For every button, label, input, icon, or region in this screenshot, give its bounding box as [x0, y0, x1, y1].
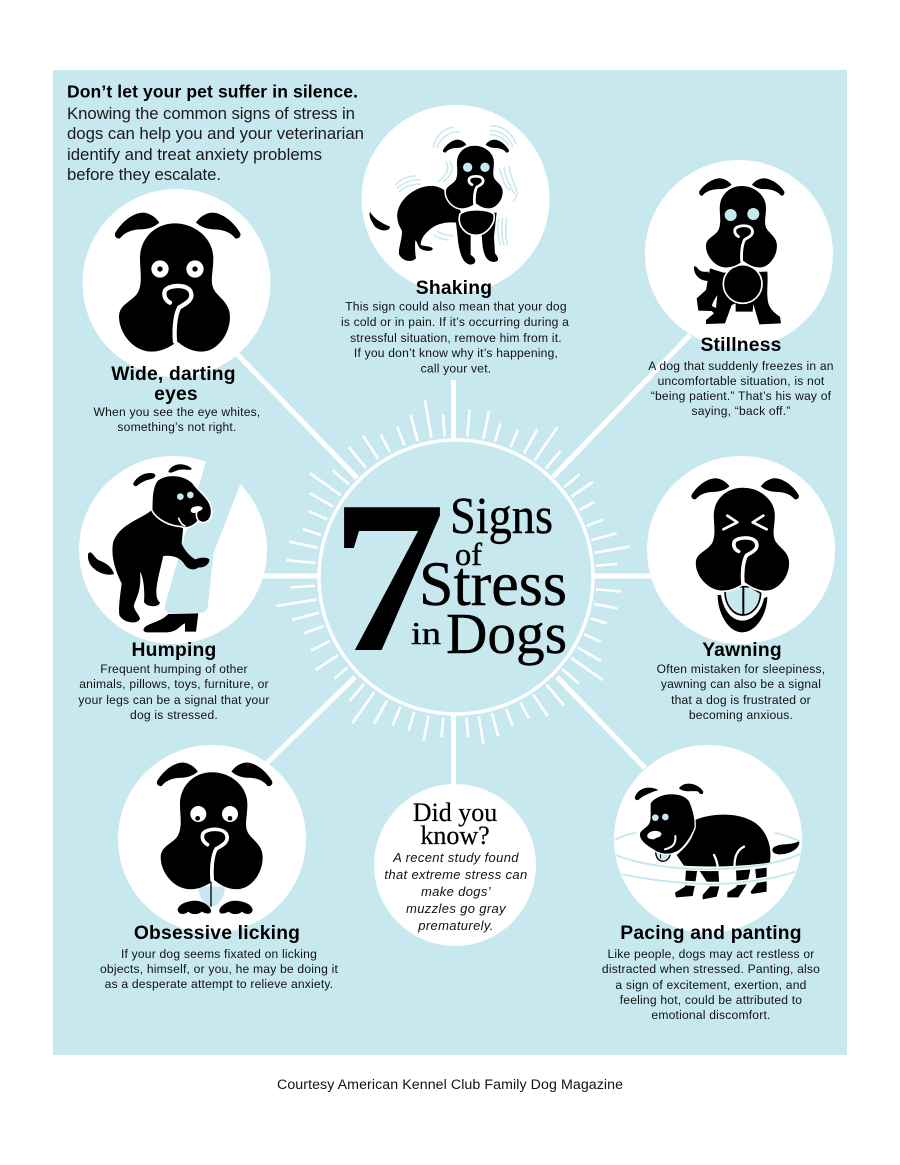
intro text block: Don’t let your pet suffer in silence.: [67, 82, 358, 102]
spokes connecting the center to each sign: [235, 335, 690, 790]
description: [341, 300, 569, 376]
title: 7 Signs of Stress in Dogs: 7: [331, 457, 446, 698]
sign: obsessive licking: [100, 745, 338, 991]
description: “being patient.” That’s his way of: [651, 389, 832, 403]
description: stressful situation, remove him from it.: [350, 331, 562, 345]
heading: Humping: [132, 640, 216, 661]
description: Often mistaken for sleepiness,: [657, 662, 825, 676]
heading: Yawning: [702, 640, 782, 661]
window cutout: [165, 450, 240, 613]
description: This sign could also mean that your dog: [345, 300, 567, 314]
heading: Pacing and panting: [620, 923, 802, 944]
description: A dog that suddenly freezes in an: [648, 359, 834, 373]
description: If you don’t know why it’s happening,: [354, 346, 558, 360]
description: [78, 662, 270, 722]
description: call your vet.: [421, 362, 491, 376]
description: saying, “back off.”: [691, 404, 791, 418]
icon: dog with wide eyes: [115, 213, 240, 352]
background panel: [53, 70, 847, 1055]
icon: yawning dog: [691, 478, 799, 632]
description: is cold or in pain. If it’s occurring during a: [341, 315, 569, 329]
description: Like people, dogs may act restless or: [607, 947, 815, 961]
title: 7 Signs of Stress in Dogs: in: [411, 615, 441, 651]
intro text block: identify and treat anxiety problems: [67, 145, 322, 164]
title: 7 Signs of Stress in Dogs: Stress: [419, 548, 567, 619]
sign: stillness: [645, 160, 834, 418]
did you know callout: know?: [420, 821, 490, 850]
description: becoming anxious.: [689, 708, 793, 722]
description: a sign of excitement, exertion, and: [615, 978, 807, 992]
title: 7 Signs of Stress in Dogs: Dogs: [446, 601, 567, 666]
icon: shaking dog: [370, 126, 517, 265]
icon: humping dog and shoe: [88, 464, 212, 632]
did you know callout: muzzles go gray: [406, 901, 507, 916]
sign: humping: [78, 450, 270, 722]
did you know callout: that extreme stress can: [384, 867, 528, 882]
description: animals, pillows, toys, furniture, or: [79, 677, 269, 691]
sign: wide, darting eyes: [82, 189, 270, 434]
description: objects, himself, or you, he may be doing it: [100, 962, 338, 976]
description: dog is stressed.: [130, 708, 218, 722]
did you know callout: Did you: [413, 798, 497, 827]
sign: pacing and panting: [602, 745, 820, 1022]
intro text block: dogs can help you and your veterinarian: [67, 124, 364, 143]
description: your legs can be a signal that your: [78, 693, 270, 707]
icon: still dog: [694, 178, 784, 324]
icon: pacing dog: [615, 784, 802, 899]
heading: Shaking: [416, 278, 492, 299]
center circle ring: [319, 440, 593, 714]
description: [657, 662, 825, 722]
intro text block: [67, 82, 364, 184]
did you know callout: make dogs’: [421, 884, 492, 899]
sign: yawning: [647, 456, 835, 722]
description: [602, 947, 820, 1022]
heading: Obsessive licking: [134, 923, 300, 944]
title: 7 Signs of Stress in Dogs: [331, 457, 567, 698]
description: uncomfortable situation, is not: [658, 374, 825, 388]
sign: shaking: [341, 105, 569, 376]
intro text block: before they escalate.: [67, 165, 221, 184]
description: yawning can also be a signal: [661, 677, 821, 691]
description: emotional discomfort.: [651, 1008, 771, 1022]
did you know callout: prematurely.: [417, 918, 494, 933]
title: 7 Signs of Stress in Dogs: of: [455, 536, 482, 572]
heading: Wide, darting: [111, 364, 236, 385]
description: [648, 359, 834, 418]
description: [94, 405, 260, 434]
description: as a desperate attempt to relieve anxiety.: [105, 977, 333, 991]
intro text block: Knowing the common signs of stress in: [67, 104, 355, 123]
description: If your dog seems fixated on licking: [121, 947, 317, 961]
heading: Stillness: [700, 335, 782, 356]
title: 7 Signs of Stress in Dogs: Signs: [450, 488, 553, 545]
description: that a dog is frustrated or: [671, 693, 811, 707]
description: something’s not right.: [117, 420, 237, 434]
description: Frequent humping of other: [100, 662, 248, 676]
icon: licking dog: [157, 763, 272, 914]
did you know callout: A recent study found: [392, 850, 519, 865]
did you know callout: [374, 784, 536, 946]
credit line: Courtesy American Kennel Club Family Dog Magazine: [277, 1077, 623, 1093]
description: [100, 947, 338, 991]
description: distracted when stressed. Panting, also: [602, 962, 820, 976]
description: When you see the eye whites,: [94, 405, 260, 419]
sunburst rays around title: [277, 400, 630, 744]
description: feeling hot, could be attributed to: [620, 993, 802, 1007]
sign: wide, darting eyes: eyes: [154, 384, 198, 405]
